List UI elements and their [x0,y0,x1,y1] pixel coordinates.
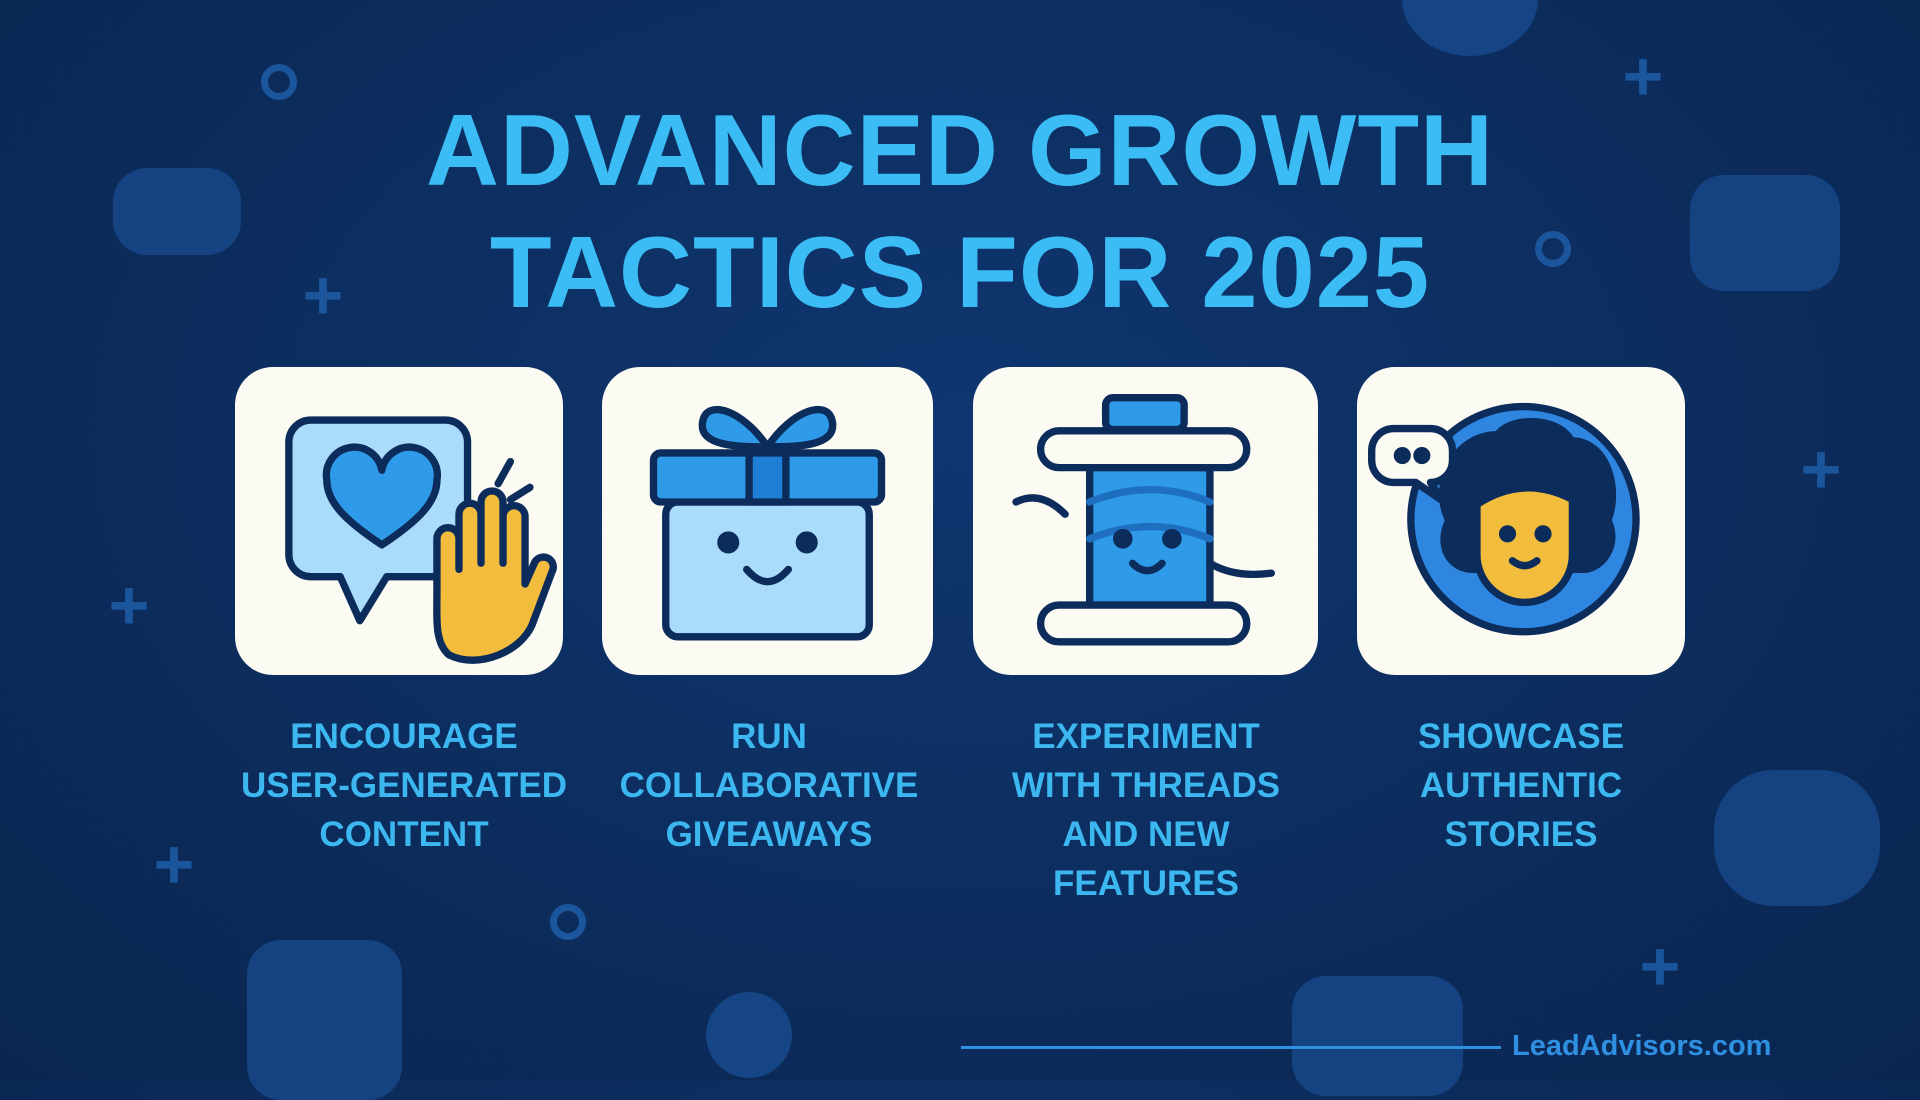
card 3: thread spool icon [973,367,1318,675]
label 4 [1418,717,1624,854]
label 2: COLLABORATIVE [620,766,918,805]
card 2: gift box icon [602,367,933,675]
decorative background shapes: + [1640,927,1680,1005]
label 3: EXPERIMENT [1032,717,1260,756]
label 4: AUTHENTIC [1420,766,1622,805]
label 3: AND NEW [1062,815,1230,854]
label 2 [620,717,918,854]
label 1: ENCOURAGE [290,717,518,756]
label 1: USER-GENERATED [241,766,567,805]
footer line [961,1046,1501,1049]
label 1 [241,717,567,854]
title: ADVANCED GROWTH [426,95,1494,207]
title [426,95,1494,329]
label 3: WITH THREADS [1012,766,1280,805]
label 3 [1012,717,1280,903]
decorative background shapes: + [109,566,149,644]
card 1: user-generated content icon [235,367,563,675]
decorative background shapes: + [154,825,194,903]
label 2: RUN [731,717,807,756]
label 3: FEATURES [1053,864,1239,903]
label 4: STORIES [1444,815,1598,854]
footer brand text: LeadAdvisors.com [1512,1030,1771,1062]
label 1: CONTENT [319,815,489,854]
label 2: GIVEAWAYS [666,815,872,854]
decorative background shapes: + [1623,37,1663,115]
label 4: SHOWCASE [1418,717,1624,756]
decorative background shapes: + [303,256,343,334]
title: TACTICS FOR 2025 [490,217,1430,329]
card 4: authentic story avatar icon [1357,367,1685,675]
decorative background shapes: + [1801,430,1841,508]
